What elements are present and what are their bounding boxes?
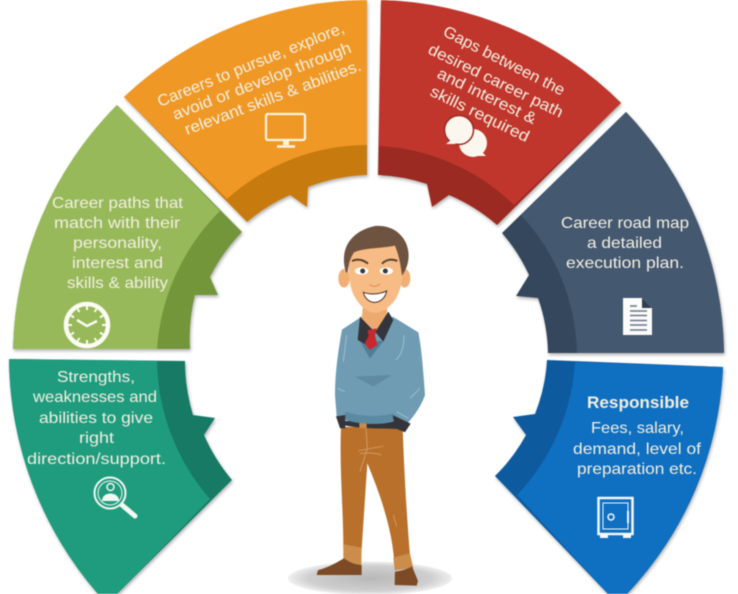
blue panel text: preparation etc. [577,461,697,478]
nose [369,284,380,286]
smile [363,291,387,302]
trousers [341,427,410,558]
eyes [355,267,368,275]
slate panel text: execution plan. [566,255,684,272]
shoes [317,558,418,586]
green panel text: match with their [54,215,181,232]
floor shadow [288,562,452,594]
red panel text: Gaps between the [440,23,567,99]
red panel text [425,23,567,146]
trouser cuffs [343,544,413,570]
panel: strengths (teal) [9,359,232,594]
red panel text: and interest & [434,65,539,128]
icon: monitor [266,114,305,146]
green panel text: Career paths that [52,195,184,212]
orange panel text: relevant skills & abilities. [182,58,364,139]
ears [338,269,350,288]
slate panel text: a detailed [587,235,662,252]
green panel text: personality, [73,235,162,252]
face [348,240,403,313]
panel: career road map (slate) [502,112,724,353]
teal panel text: right [79,430,115,447]
slate panel text [561,215,689,272]
eyebrows [352,260,397,264]
panel: career paths (green) [13,105,242,349]
orange panel text: avoid or develop through [170,40,354,124]
icon: safe [598,498,632,538]
orange panel text: Careers to pursue, explore, [155,20,347,111]
blue panel text [573,393,702,478]
neck [362,302,387,332]
teal panel text: weaknesses and [32,389,157,406]
red panel text: skills required [427,83,532,146]
sweater [335,317,425,424]
blue panel text: Fees, salary, [591,420,684,437]
icon: speech bubbles [444,116,487,157]
slate panel text: Career road map [561,215,689,232]
shirt collar [358,312,393,344]
panel: gaps (red) [378,0,621,225]
panel: responsible (blue) [495,360,723,594]
orange panel text [155,20,364,139]
figure: smiling man in sweater [288,226,452,594]
blue panel text: Responsible [587,393,689,412]
teal panel text [27,369,166,468]
teal panel text: direction/support. [27,451,166,468]
tie [365,328,377,350]
panel: careers to pursue (orange) [124,0,367,222]
green panel text [52,195,184,292]
teal panel text: abilities to give [39,410,153,427]
icon: magnifier with person [94,478,135,516]
red panel text: desired career path [425,41,566,121]
hair [344,226,409,276]
icon: document [623,298,652,335]
icon: clock [66,304,108,346]
blue panel text: demand, level of [573,441,702,458]
cuffs [336,415,411,432]
green panel text: skills & ability [67,275,168,292]
green panel text: interest and [72,255,163,272]
belt [343,421,397,429]
teal panel text: Strengths, [57,369,135,386]
